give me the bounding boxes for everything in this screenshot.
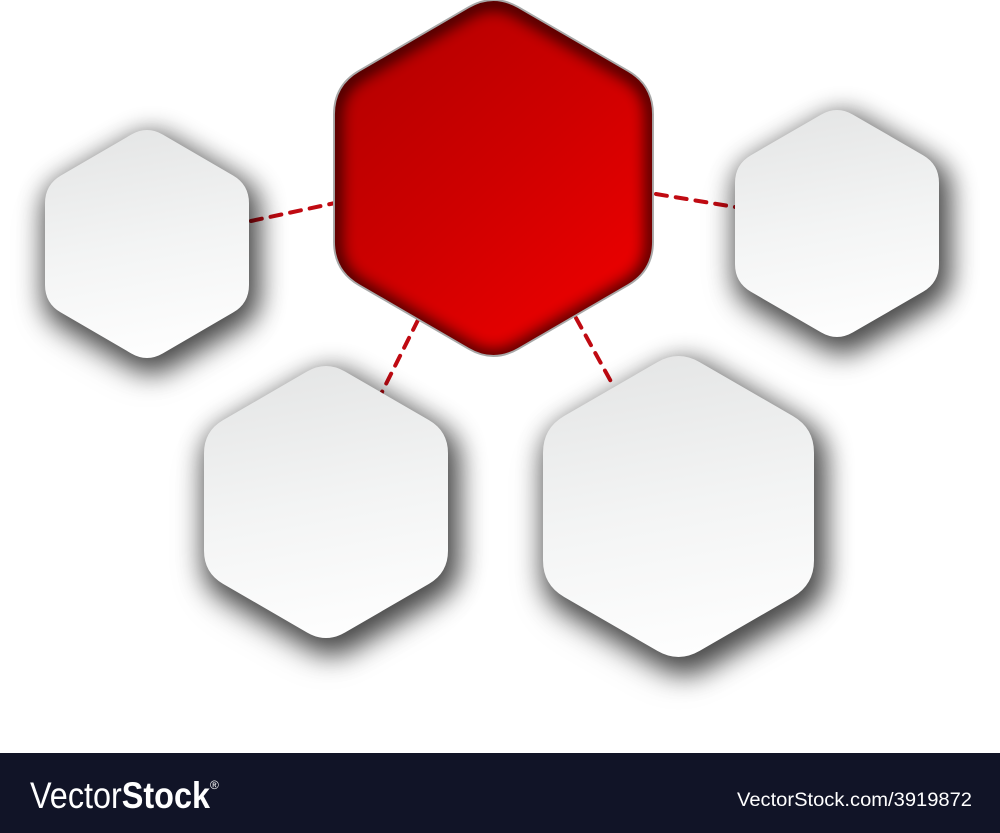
- hexagon: lower right paper: [543, 356, 826, 677]
- hexagon: upper left paper: [44, 130, 260, 376]
- connector: center to lower right hexagon: [576, 318, 614, 387]
- hexagon: central red cut-out: [333, 0, 654, 357]
- footer logo: VectorStock: [30, 775, 210, 816]
- connector: center to upper right hexagon: [656, 194, 735, 207]
- footer logo registered mark: ®: [210, 778, 219, 792]
- hexagon: upper right paper: [735, 110, 951, 355]
- footer image id: VectorStock.com/3919872: [737, 790, 972, 811]
- footer bar: [0, 753, 1000, 833]
- hexagon: lower left paper: [204, 366, 460, 658]
- connector: center to upper left hexagon: [251, 203, 335, 221]
- connector: center to lower left hexagon: [381, 320, 418, 394]
